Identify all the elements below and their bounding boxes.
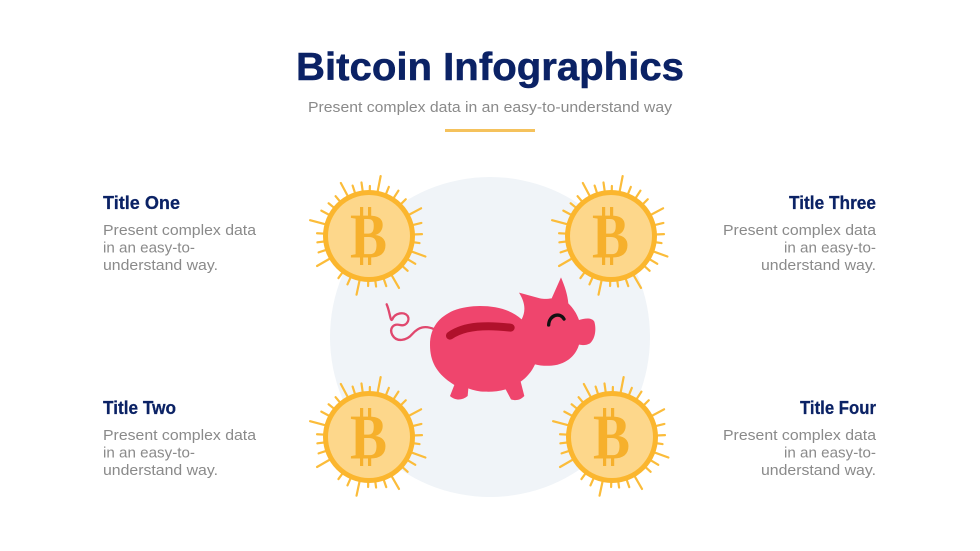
text block: title two: Present complex data <box>103 428 257 444</box>
background circle <box>330 177 650 497</box>
title: Bitcoin Infographics <box>296 46 684 89</box>
text block: title four: in an easy-to- <box>784 446 876 462</box>
text block: title four <box>723 398 877 479</box>
icon: bitcoin coin bottom left <box>310 377 425 496</box>
text block: title three: in an easy-to- <box>784 240 876 256</box>
text block: title two: in an easy-to- <box>103 446 195 462</box>
text block: title two <box>103 398 257 479</box>
text block: title one: understand way. <box>103 258 218 274</box>
text block: title one <box>103 193 257 274</box>
icon: bitcoin coin bottom left: B <box>350 402 387 472</box>
icon: bitcoin coin bottom right <box>553 377 668 496</box>
text block: title two: understand way. <box>103 463 218 479</box>
icon: piggy bank <box>387 277 595 400</box>
icon: bitcoin coin top left <box>310 176 425 295</box>
subtitle: Present complex data in an easy-to-understand way <box>308 99 673 116</box>
text block: title four: Title Four <box>800 398 876 418</box>
text block: title three: Present complex data <box>723 223 877 239</box>
text block: title three <box>723 193 877 274</box>
icon: bitcoin coin top right <box>552 176 667 295</box>
text block: title three: Title Three <box>789 193 876 213</box>
text block: title four: Present complex data <box>723 428 877 444</box>
text block: title three: understand way. <box>761 258 876 274</box>
icon: bitcoin coin top right: B <box>592 200 629 272</box>
text block: title one: Present complex data <box>103 223 257 239</box>
title underline <box>445 129 535 132</box>
icon: bitcoin coin top left: B <box>350 200 387 272</box>
text block: title four: understand way. <box>761 463 876 479</box>
icon: bitcoin coin bottom right: B <box>593 402 630 472</box>
text block: title one: Title One <box>103 193 180 213</box>
text block: title one: in an easy-to- <box>103 240 195 256</box>
text block: title two: Title Two <box>103 398 176 418</box>
